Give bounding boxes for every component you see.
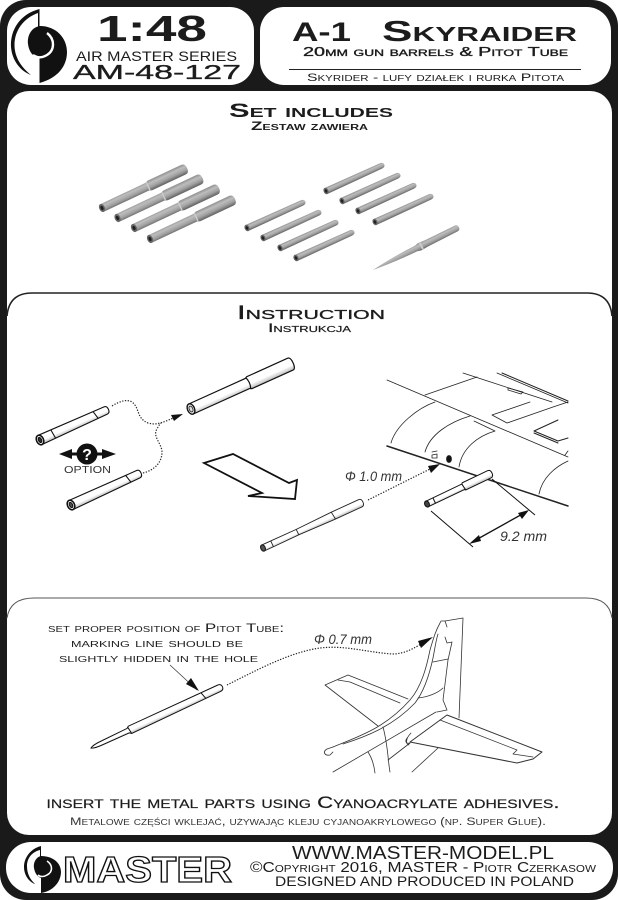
footer logo bbox=[24, 846, 232, 893]
panel: scale and series bbox=[7, 7, 254, 85]
pitot note: marking line should be bbox=[71, 636, 243, 650]
copyright: ©Copyright 2016, MASTER - Piotr Czerkasow bbox=[250, 860, 597, 876]
thin barrels set two bbox=[322, 161, 435, 226]
icon: option arrows bbox=[59, 444, 116, 464]
panel: instruction bbox=[7, 293, 612, 553]
dotted arrow to tail bbox=[227, 637, 433, 685]
panel: set includes bbox=[97, 101, 461, 274]
series name: AIR MASTER SERIES bbox=[76, 48, 237, 64]
dimension label: 9.2 mm bbox=[500, 528, 547, 544]
heading: Instruction bbox=[237, 303, 385, 324]
thin barrels set one bbox=[243, 198, 356, 262]
dotted arrow to wing hole bbox=[368, 464, 440, 500]
subheading: Instrukcja bbox=[268, 321, 352, 335]
part: lower barrel option bbox=[66, 468, 143, 511]
diameter label: Φ 1.0 mm bbox=[345, 468, 402, 484]
dotted connector lines bbox=[112, 401, 183, 473]
part: assembled barrel bbox=[259, 498, 365, 553]
brand wordmark: MASTER bbox=[63, 849, 232, 890]
part: pitot tube bbox=[89, 683, 224, 752]
tail line drawing bbox=[324, 618, 542, 773]
pitot note: set proper position of Pitot Tube: bbox=[48, 621, 284, 635]
product code: AM-48-127 bbox=[73, 62, 241, 84]
adhesive instruction: insert the metal parts using Cyanoacrylate adhesives. bbox=[46, 793, 560, 812]
pitot note: slightly hidden in the hole bbox=[59, 651, 258, 665]
callout arrow bbox=[170, 665, 199, 691]
polish adhesive instruction: Metalowe części wklejać, używając kleju cyjanoakrylowego (np. Super Glue). bbox=[70, 816, 546, 828]
pitot tube part bbox=[371, 224, 461, 274]
tail diameter label: Φ 0.7 mm bbox=[314, 631, 372, 647]
part: barrel fitted on wing bbox=[423, 469, 494, 509]
large barrels bbox=[97, 163, 237, 245]
main title: Skyraider bbox=[382, 16, 578, 48]
wing line drawing bbox=[387, 373, 568, 506]
icon: spiral logo small bbox=[24, 846, 61, 893]
part: large barrel bbox=[185, 357, 296, 416]
website: WWW.MASTER-MODEL.PL bbox=[292, 843, 554, 863]
heading: Set includes bbox=[229, 101, 394, 122]
panel: title bbox=[260, 7, 611, 85]
icon: option arrows: ? bbox=[82, 447, 92, 464]
part: upper barrel option bbox=[35, 405, 110, 446]
polish subtitle: Skyrider - lufy działek i rurka Pitota bbox=[307, 72, 565, 84]
main title bbox=[292, 16, 578, 48]
subheading: Zestaw zawiera bbox=[251, 119, 368, 133]
pitot note bbox=[48, 621, 284, 665]
panel: pitot tube bbox=[7, 598, 612, 828]
icon: spiral logo bbox=[11, 9, 67, 83]
dimension lines bbox=[431, 479, 535, 547]
arrow: next step bbox=[204, 454, 297, 499]
origin line: DESIGNED AND PRODUCED IN POLAND bbox=[275, 874, 574, 889]
option label: OPTION bbox=[64, 465, 111, 476]
panel: footer bbox=[6, 842, 613, 893]
subtitle: 20mm gun barrels & Pitot Tube bbox=[303, 44, 568, 59]
scale: 1:48 bbox=[97, 8, 207, 49]
main title: A-1 bbox=[292, 17, 351, 47]
